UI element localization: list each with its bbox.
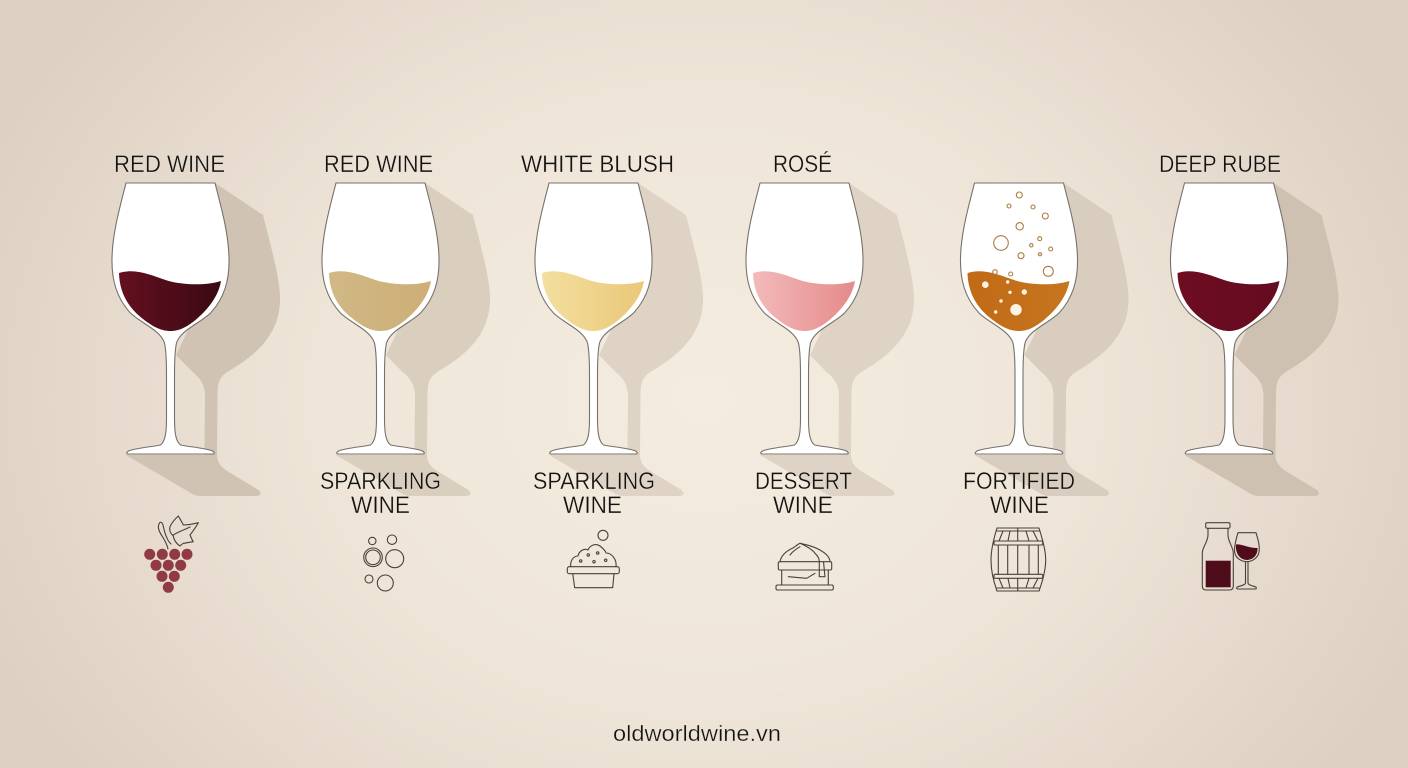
icon: bubbles xyxy=(364,535,404,591)
column 1: red wine glass xyxy=(112,151,280,496)
label: sparkling wine (column 3): WINE xyxy=(563,492,622,519)
label: sparkling wine (column 3) xyxy=(533,468,655,519)
label: sparkling wine (column 2) xyxy=(320,468,441,519)
label: deep rube: DEEP RUBE xyxy=(1159,151,1281,178)
icon: cupcake dessert xyxy=(567,530,619,588)
label: red wine second: RED WINE xyxy=(324,151,433,178)
icon: grapes with leaf xyxy=(144,516,198,593)
label: rosé: ROSÉ xyxy=(773,151,832,178)
label: fortified wine xyxy=(963,468,1075,519)
column 4: rosé glass xyxy=(746,151,914,496)
column 5: fortified glass with bubbles xyxy=(960,183,1129,496)
label: sparkling wine (column 2): WINE xyxy=(351,492,410,519)
label: dessert wine xyxy=(755,468,852,519)
icon: cake dessert xyxy=(776,543,833,590)
footer: website: oldworldwine.vn xyxy=(613,721,781,746)
label: sparkling wine (column 2): SPARKLING xyxy=(320,468,441,495)
bubbles in wine xyxy=(982,280,1027,315)
column 2: straw wine glass xyxy=(322,151,490,496)
label: dessert wine: DESSERT xyxy=(755,468,852,495)
label: sparkling wine (column 3): SPARKLING xyxy=(533,468,655,495)
label: fortified wine: WINE xyxy=(990,492,1049,519)
label: fortified wine: FORTIFIED xyxy=(963,468,1075,495)
column 6: deep ruby glass xyxy=(1159,151,1339,496)
column 3: white wine glass xyxy=(521,151,703,496)
icon: bottle and glass xyxy=(1202,523,1259,590)
icon: barrel xyxy=(991,528,1046,591)
label: dessert wine: WINE xyxy=(773,492,833,519)
label: red wine: RED WINE xyxy=(114,151,225,178)
label: white blush: WHITE BLUSH xyxy=(521,151,674,178)
rising bubbles xyxy=(993,192,1053,276)
